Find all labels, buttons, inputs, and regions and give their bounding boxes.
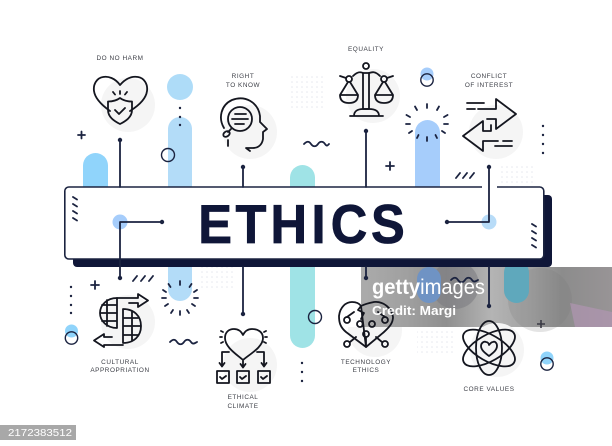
item: cultural appropriation: CULTURAL bbox=[101, 359, 139, 366]
title: ETHICS bbox=[198, 194, 405, 255]
connector lines bbox=[112, 129, 496, 316]
item: conflict of interest: CONFLICT bbox=[471, 73, 507, 80]
item: right to know: TO KNOW bbox=[226, 82, 261, 89]
item: technology ethics bbox=[339, 302, 402, 374]
item: ethical climate: ETHICAL bbox=[228, 394, 258, 401]
item: core values: CORE VALUES bbox=[463, 386, 515, 393]
item: technology ethics: TECHNOLOGY bbox=[341, 359, 391, 366]
item: ethical climate: CLIMATE bbox=[227, 403, 259, 410]
item: do no harm: DO NO HARM bbox=[96, 55, 144, 62]
item: conflict of interest bbox=[463, 73, 523, 159]
decorative accents bbox=[65, 68, 554, 382]
item: core values bbox=[457, 321, 524, 393]
item: ethical climate bbox=[217, 329, 277, 410]
item: equality bbox=[340, 46, 400, 123]
item: right to know bbox=[221, 73, 277, 159]
image id tag bbox=[0, 425, 76, 440]
item: cultural appropriation bbox=[90, 294, 155, 374]
item: conflict of interest: OF INTEREST bbox=[465, 82, 513, 89]
banner bbox=[65, 184, 552, 267]
item: technology ethics: ETHICS bbox=[353, 367, 379, 374]
watermark credit: Credit: Margi bbox=[372, 303, 456, 318]
item: cultural appropriation: APPROPRIATION bbox=[90, 367, 150, 374]
watermark panel bbox=[361, 260, 612, 332]
item: right to know: RIGHT bbox=[232, 73, 254, 80]
watermark wordmark: gettyimages bbox=[372, 276, 485, 299]
item: do no harm bbox=[94, 55, 155, 132]
item: equality: EQUALITY bbox=[348, 46, 384, 53]
image id tag: 2172383512 bbox=[8, 428, 72, 439]
background pastel bars bbox=[83, 74, 440, 348]
